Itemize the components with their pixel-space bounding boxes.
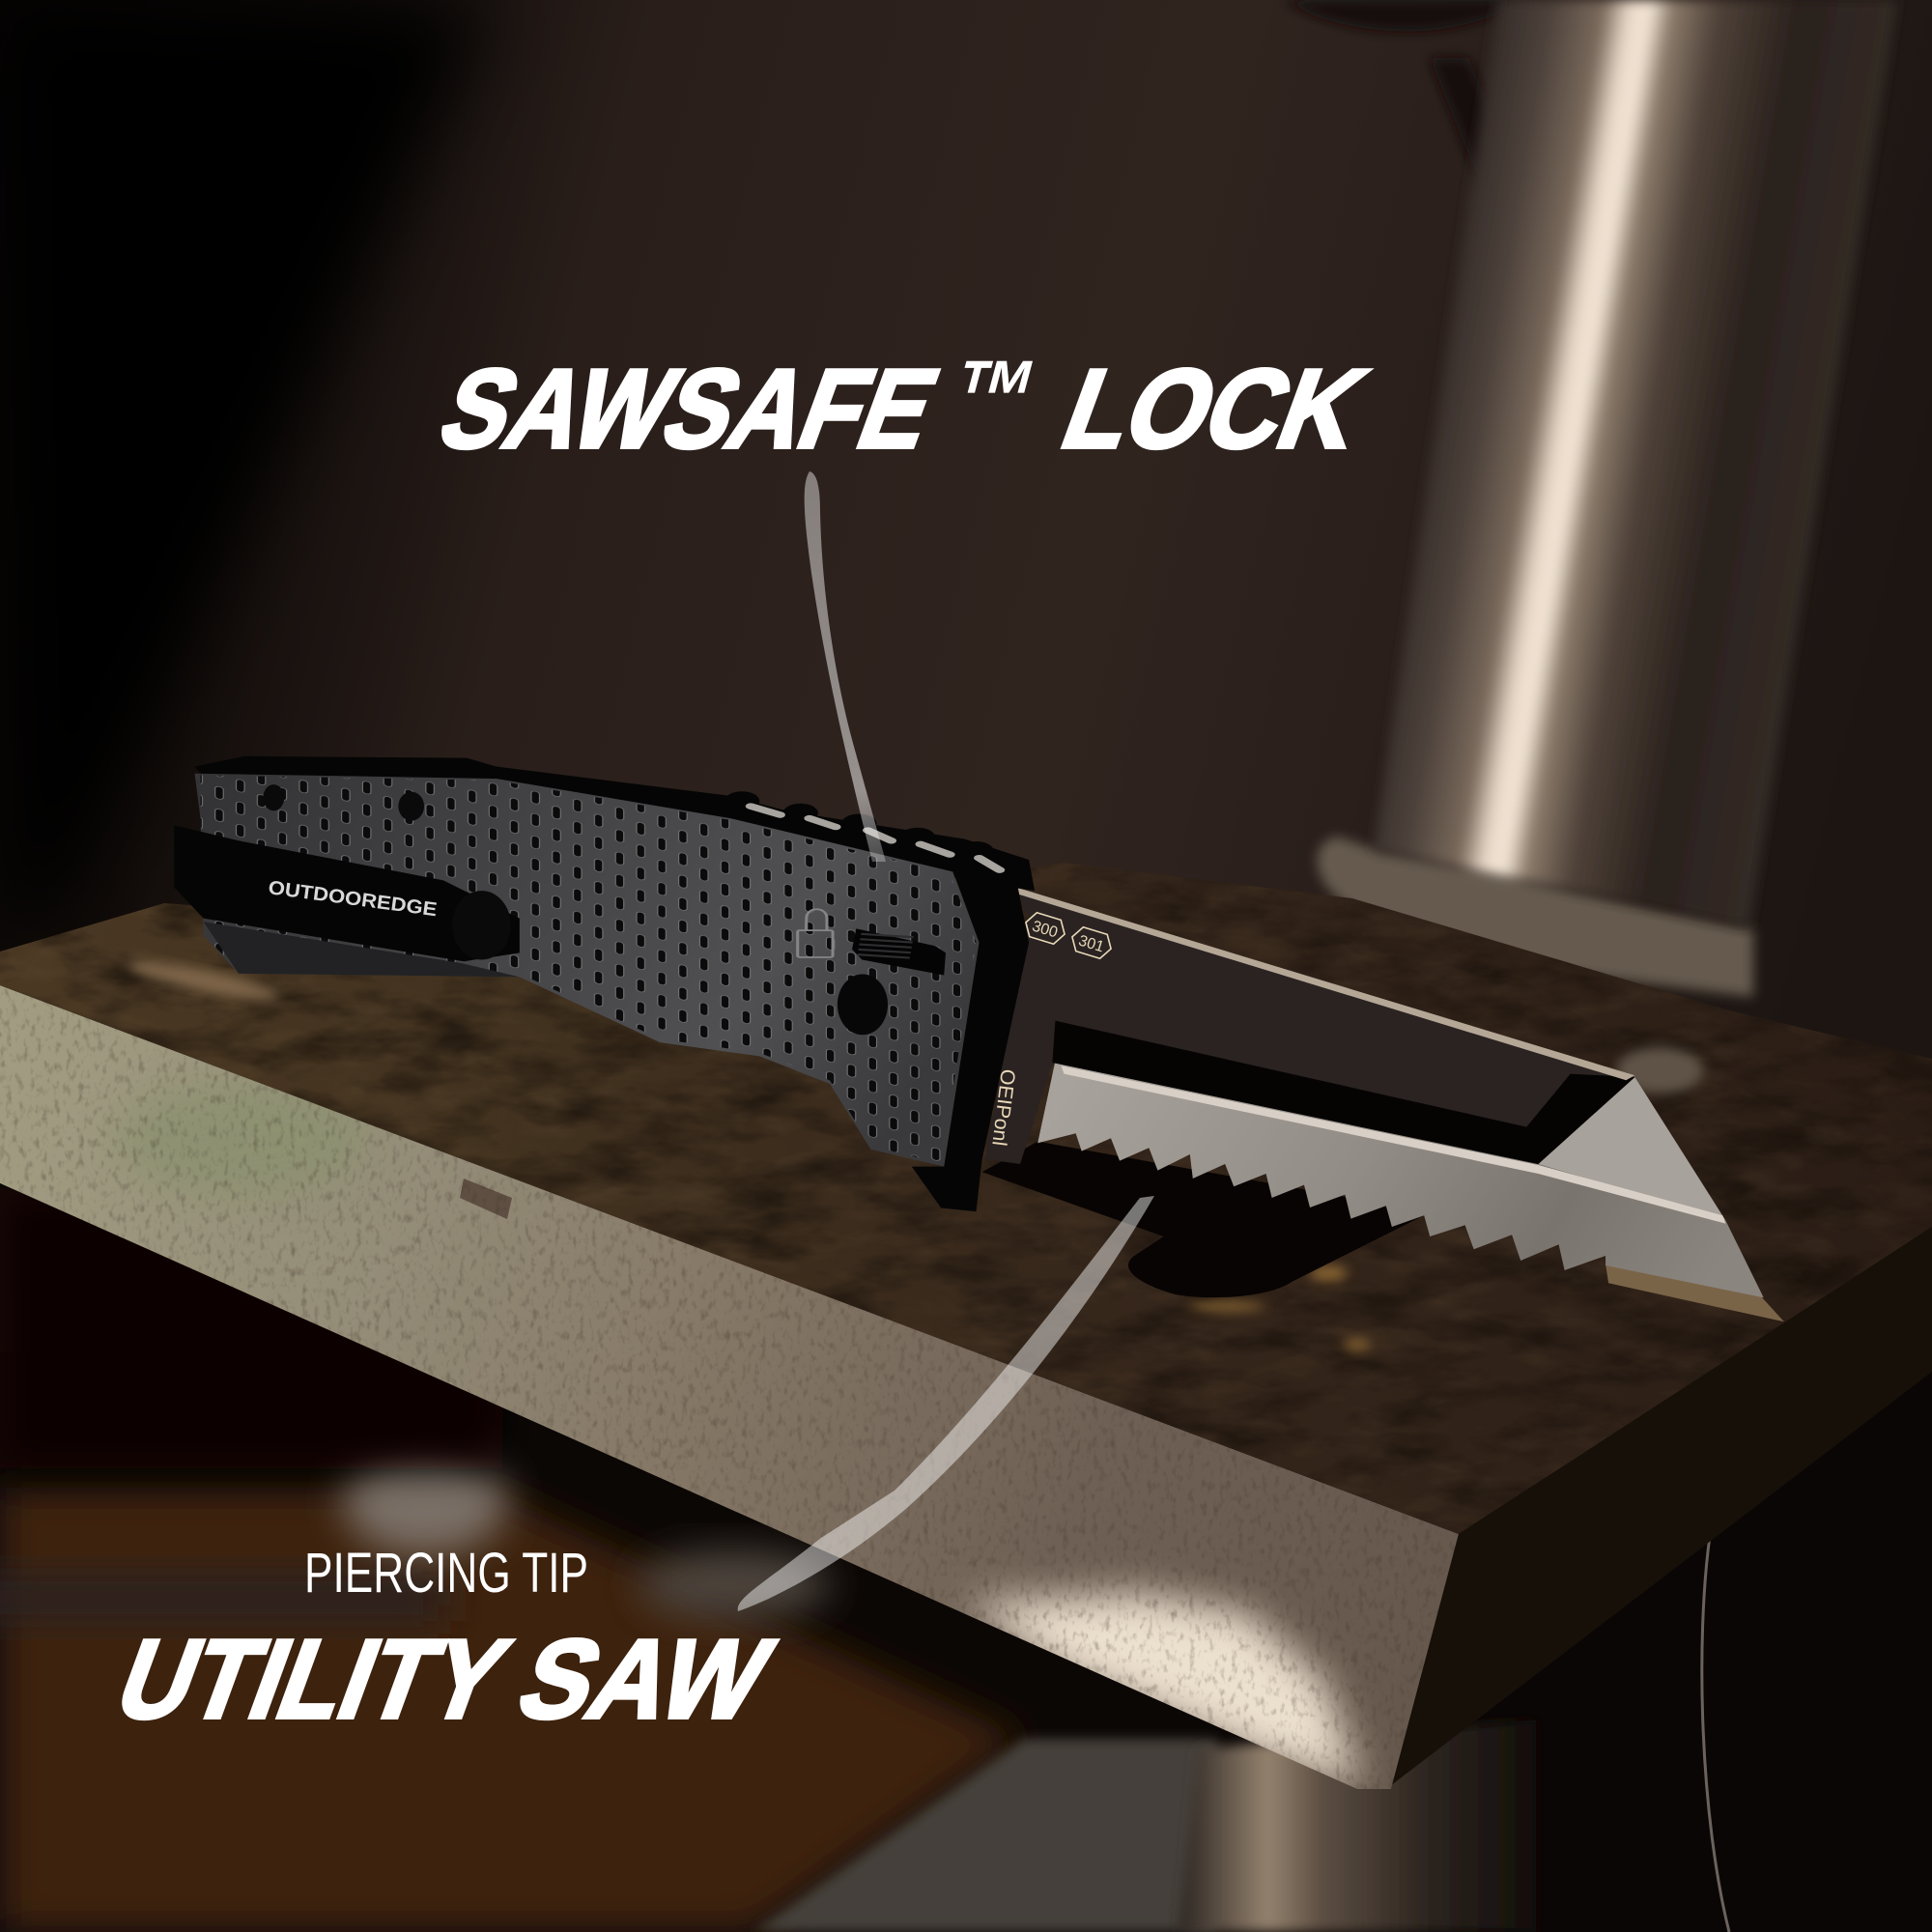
callout line: saw lock [805, 471, 886, 862]
lower press column [1179, 1719, 1536, 1932]
background: floor [0, 1188, 1546, 1932]
rear black liner and butt [912, 870, 1029, 1211]
background: lower right darkness [1381, 1256, 1932, 1932]
brand on clip: OUTDOOREDGE [267, 877, 439, 921]
pivot screw [838, 974, 888, 1035]
handle scale [195, 774, 980, 1167]
spine jimping bumps [724, 791, 994, 861]
table surface mottling [0, 850, 1932, 1546]
heading: utility saw: SAW [503, 1617, 786, 1742]
spine jimping band [195, 756, 1035, 891]
serrated saw [1037, 1061, 1764, 1297]
shadow and slot under teeth [982, 1142, 1427, 1297]
badge 301: 301 [1076, 932, 1106, 955]
table right side face [1386, 1227, 1932, 1789]
jimping highlights [751, 807, 1000, 870]
table front face [0, 985, 1468, 1797]
thin wire [1702, 1536, 1729, 1932]
badge 300: 300 [1030, 918, 1060, 941]
blade marking: steel badges [1022, 910, 1115, 961]
top middle screw [398, 792, 424, 821]
press column flange [1318, 837, 1753, 997]
heading: SawSafe lock: SAWSAFE [425, 347, 953, 471]
dimple texture [201, 775, 977, 1163]
heading: utility saw: UTILITY [101, 1617, 524, 1742]
lock slider ridges [858, 934, 914, 958]
debris near slot [1188, 1265, 1371, 1350]
blade body [985, 882, 1634, 1164]
upper black blade [985, 882, 1634, 1164]
pocket clip [174, 825, 520, 961]
handle [174, 756, 1035, 1211]
saw blade and tip [982, 1061, 1784, 1321]
clip pivot screw [452, 891, 511, 959]
blade steel text: OEIPonl [987, 1067, 1019, 1148]
heading: SawSafe lock: ™ [937, 339, 1049, 453]
top rear screw [263, 784, 284, 810]
table top surface [0, 863, 1932, 1534]
knife [174, 756, 1784, 1321]
background: top bracket [1285, 0, 1507, 203]
blade dark lower bevel [1052, 1021, 1634, 1164]
background: lower grey floor plate [753, 1739, 1217, 1932]
lower rear handle shadow [204, 922, 520, 977]
lock slider recess [852, 928, 946, 976]
light wear patch [125, 954, 281, 1007]
blurred highlight behind blade tip [1616, 1047, 1703, 1094]
tan lower edge [1605, 1264, 1784, 1321]
background: dark left shadow [0, 0, 493, 927]
callout line: utility saw [738, 1196, 1154, 1611]
heading: utility saw [101, 1617, 786, 1742]
steel table [0, 850, 1932, 1797]
tip triangle [1538, 1077, 1725, 1220]
lock icon [798, 909, 833, 957]
press column [1374, 0, 1897, 927]
label: piercing tip: PIERCING TIP [304, 1542, 588, 1605]
heading: SawSafe lock: LOCK [1047, 347, 1381, 471]
saw ridge highlight [1061, 1065, 1725, 1224]
heading: SawSafe lock [425, 339, 1381, 471]
spine highlight [1000, 882, 1634, 1080]
